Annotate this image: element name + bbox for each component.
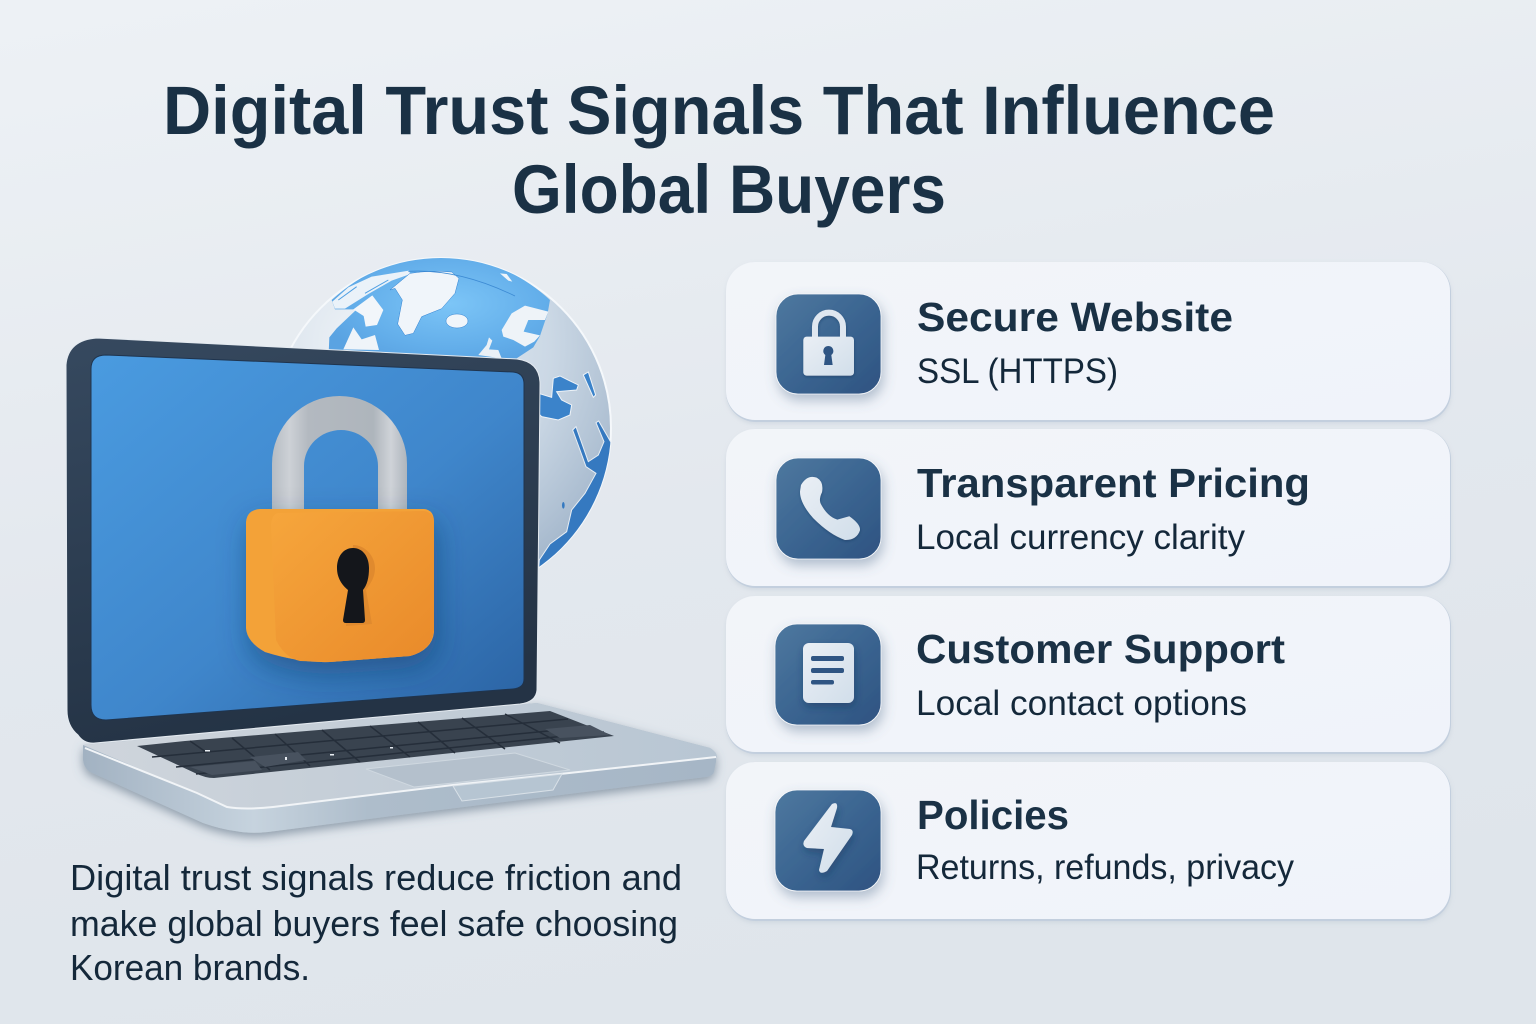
trackpad bbox=[366, 753, 570, 787]
illustration: laptop base bbox=[83, 703, 717, 833]
panel: customer support bbox=[726, 596, 1451, 754]
caption bbox=[70, 857, 682, 988]
icon: document tile bbox=[775, 624, 881, 725]
heading: Transparent Pricing bbox=[917, 460, 1310, 506]
caption: Digital trust signals reduce friction and bbox=[70, 857, 682, 898]
icon: lightning bolt tile bbox=[775, 790, 881, 891]
trackpad notch bbox=[453, 774, 562, 801]
subtext: Returns, refunds, privacy bbox=[916, 848, 1294, 887]
subtext: Local contact options bbox=[916, 684, 1247, 723]
panel: policies bbox=[726, 762, 1451, 921]
illustration: padlock bbox=[246, 396, 434, 662]
illustration: globe bbox=[290, 257, 612, 568]
title: Global Buyers bbox=[512, 151, 946, 228]
icon: padlock tile bbox=[776, 294, 881, 394]
panel: transparent pricing bbox=[726, 429, 1451, 588]
icon: phone tile bbox=[776, 458, 881, 559]
panel: secure website bbox=[726, 262, 1451, 422]
illustration: laptop screen bbox=[66, 338, 540, 743]
keyboard bbox=[137, 711, 614, 778]
heading: Secure Website bbox=[917, 294, 1233, 340]
heading: Customer Support bbox=[916, 626, 1285, 672]
caption: Korean brands. bbox=[70, 947, 310, 988]
title: Digital Trust Signals That Influence bbox=[163, 72, 1275, 149]
caption: make global buyers feel safe choosing bbox=[70, 903, 678, 944]
subtext: Local currency clarity bbox=[916, 518, 1245, 557]
keyhole bbox=[337, 545, 375, 626]
subtext: SSL (HTTPS) bbox=[917, 352, 1118, 391]
padlock body bbox=[246, 509, 434, 662]
padlock shackle bbox=[272, 396, 407, 512]
heading: Policies bbox=[917, 792, 1069, 838]
title bbox=[163, 72, 1275, 228]
